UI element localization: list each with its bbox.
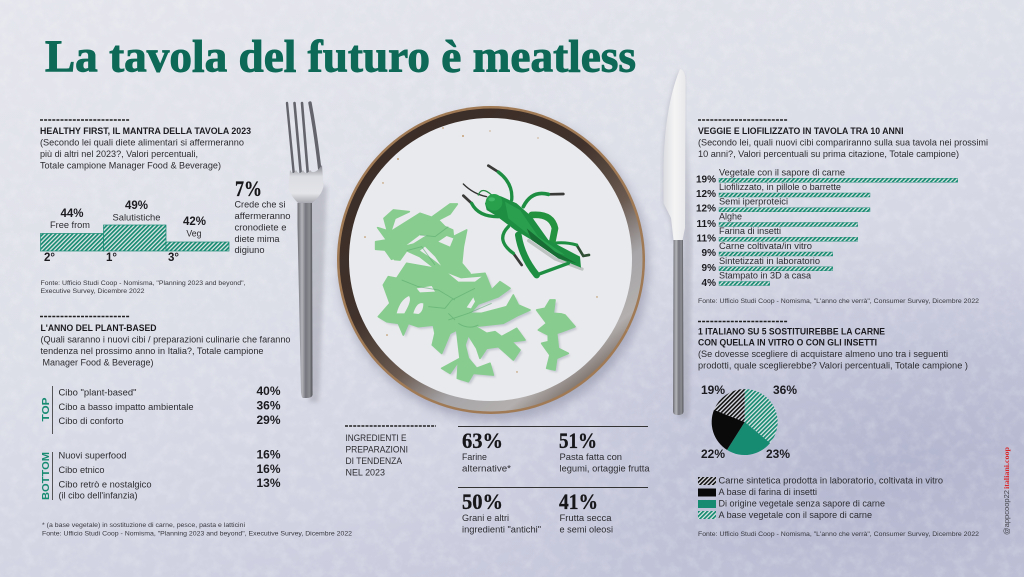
table: top: 36% xyxy=(256,400,280,412)
seaweed shadow xyxy=(381,266,577,384)
bar chart: diets: 42% xyxy=(183,216,206,228)
source: Fonte: Ufficio Studi Coop - Nomisma, "L'anno che verrà", Consumer Survey, Dicembre 2022 xyxy=(698,531,979,538)
source: Executive Survey, Dicembre 2022 xyxy=(40,288,145,295)
bar chart: diets: 2° xyxy=(44,252,55,264)
panel: veggie e liofilizzato xyxy=(696,120,988,305)
stat: 51% xyxy=(559,428,650,474)
text block: question: (Quali saranno i nuovi cibi / preparazioni culinarie che faranno xyxy=(40,334,291,344)
bar chart: diets: 44% xyxy=(60,208,84,220)
legend: Carne sintetica prodotta in laboratorio, coltivata in vitro xyxy=(718,476,943,486)
table: bottom: Cibo etnico xyxy=(58,465,105,475)
heading: veggie: VEGGIE E LIOFILIZZATO IN TAVOLA TRA 10 ANNI xyxy=(698,126,904,136)
text block: question xyxy=(698,349,968,370)
panel: healthy first xyxy=(40,120,291,295)
bar chart: new foods: Farina di insetti xyxy=(719,226,781,236)
text block: panel label: PREPARAZIONI xyxy=(346,444,408,454)
title: La tavola del futuro è meatless xyxy=(45,30,636,82)
seaweed xyxy=(376,204,575,382)
callout: 7%: Crede che si xyxy=(234,200,286,210)
bar chart: new foods: 12% xyxy=(696,189,716,200)
bar chart: new foods: Semi iperproteici xyxy=(719,196,788,206)
pie chart: 22% xyxy=(701,449,725,461)
text block: question xyxy=(40,334,291,368)
bar chart: new foods: Carne coltivata/in vitro xyxy=(719,241,812,251)
text block: question: (Secondo lei, quali nuovi cibi compariranno sulla sua tavola nei prossimi xyxy=(698,138,988,148)
table: top: Cibo di conforto xyxy=(58,416,124,426)
text block: question: prodotti, quale sceglierebbe? Valori percentuali, Totale campione ) xyxy=(698,360,968,370)
footnote and source xyxy=(42,522,352,538)
pie chart xyxy=(701,385,797,461)
bar chart: new foods: 19% xyxy=(696,174,716,186)
illustration: plate with grasshopper and paper seaweed xyxy=(337,106,649,421)
stat: 41%: Frutta secca xyxy=(560,513,612,523)
table: bottom: 16% xyxy=(256,450,280,462)
stat: 41% xyxy=(559,489,613,534)
table: top: Cibo a basso impatto ambientale xyxy=(58,402,194,412)
bar chart: new foods: Vegetale con il sapore di carne xyxy=(719,168,845,178)
bar chart: new foods: Stampato in 3D a casa xyxy=(719,270,811,280)
table: bottom: (il cibo dell'infanzia) xyxy=(58,490,138,500)
footnote and source: Fonte: Ufficio Studi Coop - Nomisma, "Planning 2023 and beyond", Executive Survey, Dicembre 2022 xyxy=(42,530,352,538)
table: bottom xyxy=(40,450,280,500)
text block: panel label: DI TENDENZA xyxy=(346,456,402,466)
text block: question: (Se dovesse scegliere di acquistare almeno uno tra i seguenti xyxy=(698,349,948,359)
table: bottom: 13% xyxy=(256,478,280,490)
text block: question xyxy=(40,138,244,170)
stat: 63%: alternative* xyxy=(462,464,512,474)
heading: healthy first: HEALTHY FIRST, IL MANTRA DELLA TAVOLA 2023 xyxy=(40,126,251,136)
heading: 1 italiano su 5: CON QUELLA IN VITRO O CON GLI INSETTI xyxy=(698,338,877,348)
legend: A base di farina di insetti xyxy=(718,487,817,497)
text block: question xyxy=(698,138,988,159)
bar chart: new foods xyxy=(696,168,958,289)
icon: knife xyxy=(662,69,692,418)
bar chart: new foods: 9% xyxy=(702,263,716,274)
table: top: Cibo "plant-based" xyxy=(58,388,136,398)
text block: question: (Secondo lei quali diete alimentari si affermeranno xyxy=(40,138,244,148)
text block: question: Manager Food & Beverage) xyxy=(42,358,154,368)
stat: 51%: 51% xyxy=(559,428,597,453)
text block: question: tendenza nel prossimo anno in Italia?, Totale campione xyxy=(40,346,264,356)
callout: 7%: affermeranno xyxy=(234,211,291,221)
grasshopper xyxy=(463,166,589,275)
stat: 63% xyxy=(462,428,512,474)
bar chart: new foods: 9% xyxy=(702,248,716,259)
heading: plant-based: L'ANNO DEL PLANT-BASED xyxy=(40,323,156,333)
callout: 7% xyxy=(234,176,291,255)
bar chart: new foods: Liofilizzato, in pillole o barrette xyxy=(719,182,841,192)
bar chart: new foods: Sintetizzati in laboratorio xyxy=(719,256,820,266)
table: top xyxy=(40,386,280,434)
icon: fork xyxy=(287,103,327,402)
legend xyxy=(698,476,943,520)
stat: 63%: 63% xyxy=(462,428,503,453)
callout: 7%: cronodiete e xyxy=(234,222,287,232)
pie chart: 23% xyxy=(766,449,790,461)
panel: 1 italiano su 5 xyxy=(698,322,979,538)
text block: panel label: INGREDIENTI E xyxy=(346,433,407,443)
text block: panel label xyxy=(346,433,408,478)
bar chart: new foods: 11% xyxy=(697,219,716,230)
text block: question: più di altri nel 2023?, Valori percentuali, xyxy=(40,149,198,159)
panel: ingredienti e preparazioni xyxy=(345,426,650,534)
text block: question: 10 anni?, Valori percentuali su prima citazione, Totale campione) xyxy=(698,149,959,159)
table: top: 40% xyxy=(256,386,280,398)
panel: plant-based xyxy=(40,316,352,538)
legend: Di origine vegetale senza sapore di carne xyxy=(718,498,885,508)
bar chart: diets: 3° xyxy=(168,252,179,264)
stat: 51%: Pasta fatta con xyxy=(560,452,622,462)
text block: question: Totale campione Manager Food & Beverage) xyxy=(40,160,221,170)
bar chart: new foods: 12% xyxy=(696,204,716,214)
heading: 1 italiano su 5 xyxy=(698,326,885,348)
pie chart: 36% xyxy=(773,385,797,397)
stat: 41%: e semi oleosi xyxy=(560,524,613,534)
text block: panel label: NEL 2023 xyxy=(346,468,385,478)
callout: 7%: digiuno xyxy=(234,245,265,255)
footnote and source: * (a base vegetale) in sostituzione di carne, pesce, pasta e latticini xyxy=(42,522,246,529)
stat: 50%: 50% xyxy=(462,489,503,514)
heading: 1 italiano su 5: 1 ITALIANO SU 5 SOSTITUIREBBE LA CARNE xyxy=(698,326,885,336)
table: top: TOP xyxy=(40,398,52,422)
legend: A base vegetale con il sapore di carne xyxy=(718,510,872,520)
stat: 41%: 41% xyxy=(559,489,598,514)
seaweed gaps xyxy=(388,235,482,314)
source xyxy=(40,280,246,295)
bar chart: new foods: Alghe xyxy=(719,212,742,222)
table: top: 29% xyxy=(256,415,280,427)
bar chart: diets: Veg xyxy=(186,228,202,238)
callout: 7%: diete mima xyxy=(234,234,280,244)
source: Fonte: Ufficio Studi Coop - Nomisma, "Planning 2023 and beyond", xyxy=(40,280,246,287)
table: bottom: BOTTOM xyxy=(40,452,52,500)
bar chart: diets: Salutistiche xyxy=(112,212,161,222)
stat: 50%: ingredienti "antichi" xyxy=(462,524,541,534)
stat: 50% xyxy=(462,489,541,534)
table: bottom: Nuovi superfood xyxy=(58,450,127,460)
credit: italiani.coop: @appcoop22 xyxy=(1002,490,1011,535)
credit: italiani.coop xyxy=(1002,447,1011,535)
source: Fonte: Ufficio Studi Coop - Nomisma, "L'anno che verrà", Consumer Survey, Dicembre 2022 xyxy=(698,298,979,305)
stat: 63%: Farine xyxy=(462,452,487,462)
stat: 51%: legumi, ortaggie frutta xyxy=(560,464,650,474)
bar chart: new foods: 11% xyxy=(697,234,716,244)
bar chart: new foods: 4% xyxy=(702,278,716,289)
bar chart: diets xyxy=(40,200,229,264)
callout: 7%: 7% xyxy=(235,176,262,201)
credit: italiani.coop: italiani.coop xyxy=(1002,447,1011,489)
table: bottom: 16% xyxy=(256,464,280,476)
pie chart: 19% xyxy=(701,385,725,397)
bar chart: diets: Free from xyxy=(50,220,90,230)
stat: 50%: Grani e altri xyxy=(462,513,509,523)
table: bottom: Cibo retrò e nostalgico xyxy=(58,480,152,490)
bar chart: diets: 49% xyxy=(125,200,148,212)
bar chart: diets: 1° xyxy=(106,252,117,264)
